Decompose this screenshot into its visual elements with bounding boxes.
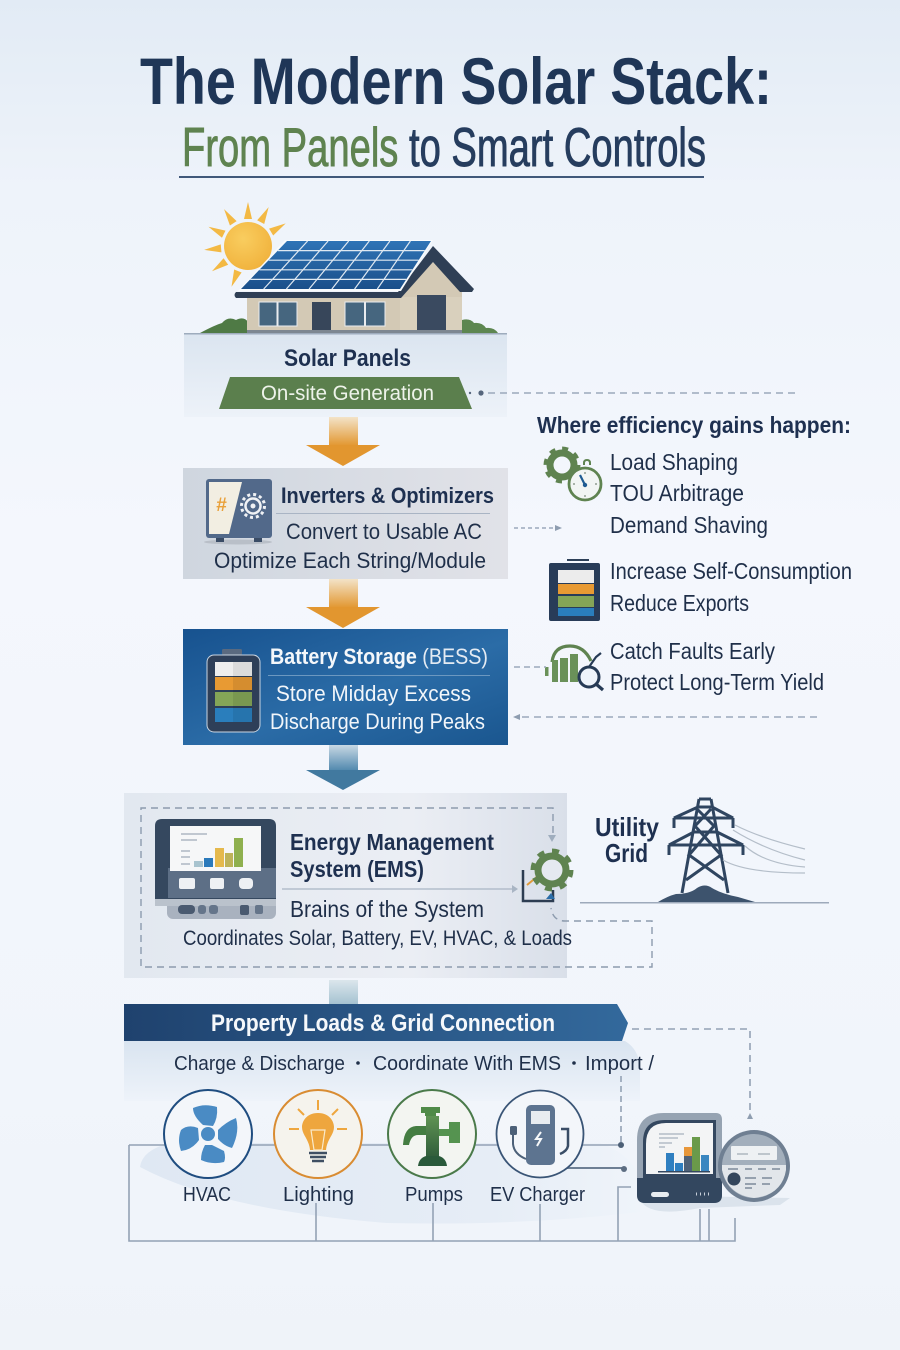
connector: solar to efficiency — [469, 390, 798, 396]
ground shadow — [140, 1143, 642, 1224]
monitor — [637, 1113, 722, 1203]
text: load shaping: Load Shaping — [610, 449, 738, 475]
dark roof — [234, 246, 474, 298]
load: EV charger — [490, 1090, 585, 1206]
text: optimize each string: Optimize Each String/Module — [214, 548, 486, 573]
icon: monitor and smart meter — [637, 1113, 790, 1212]
icon: sun — [204, 202, 288, 288]
panel: energy management system — [124, 793, 652, 978]
label: pumps: Pumps — [405, 1184, 463, 1206]
icon: bulb — [289, 1100, 347, 1161]
heading: solar panels: Solar Panels — [284, 345, 411, 372]
text: coordinates: Coordinates Solar, Battery, EV, HVAC, & Loads — [183, 927, 572, 950]
label: lighting: Lighting — [283, 1184, 354, 1206]
icon: pump — [403, 1107, 460, 1166]
arrow: inverter to battery — [306, 579, 380, 628]
heading: inverters: Inverters & Optimizers — [281, 483, 494, 508]
panel: property loads header — [124, 1004, 628, 1041]
icon: house with solar roof — [200, 240, 498, 333]
text: bullet two — [572, 1061, 576, 1065]
icon: monitoring chart and magnifier — [545, 646, 603, 690]
text: brains of the system: Brains of the System — [290, 896, 484, 922]
text: discharge during peaks: Discharge During Peaks — [270, 709, 485, 734]
badge: on-site generation — [219, 377, 472, 409]
connector: inverter to efficiency — [514, 525, 562, 531]
icon: fan — [179, 1105, 237, 1163]
load: pumps — [388, 1090, 476, 1206]
bushes — [200, 318, 248, 333]
text: import: Import / — [585, 1053, 654, 1075]
text: increase self-consumption: Increase Self-Consumption — [610, 558, 852, 584]
icon: inverter — [204, 479, 272, 544]
icon: battery tablet — [549, 559, 600, 621]
text: TOU arbitrage: TOU Arbitrage — [610, 480, 744, 506]
panel: battery storage — [183, 629, 508, 745]
title line 2: From Panels to Smart Controls — [182, 116, 706, 178]
connector: return to battery — [513, 714, 822, 720]
connector: battery to monitoring — [514, 666, 546, 668]
icon: gear and stopwatch — [546, 448, 601, 500]
panel: property loads header: Property Loads & Grid Connection — [211, 1010, 555, 1037]
solar array — [238, 240, 433, 291]
panel: inverters and optimizers — [183, 468, 508, 579]
heading: EMS line 2: System (EMS) — [290, 856, 424, 882]
icon: battery — [207, 649, 260, 732]
text: protect long-term yield: Protect Long-Term Yield — [610, 669, 824, 695]
title — [140, 44, 772, 178]
load: lighting — [274, 1090, 362, 1206]
heading: efficiency gains: Where efficiency gains happen: — [537, 412, 851, 438]
label: HVAC: HVAC — [183, 1184, 231, 1206]
panel: loads subheader — [124, 1041, 654, 1101]
panel: efficiency gains — [537, 412, 852, 695]
title line 1: The Modern Solar Stack: — [140, 44, 772, 118]
text: catch faults early: Catch Faults Early — [610, 638, 775, 664]
arrow: EMS to loads — [329, 980, 358, 1005]
arrow: battery to EMS — [306, 745, 380, 790]
dashed EMS loop — [141, 808, 652, 967]
text: charge and discharge: Charge & Discharge — [174, 1053, 345, 1075]
connector dots — [618, 1113, 753, 1172]
badge: on-site generation: On-site Generation — [261, 382, 434, 405]
walls — [247, 262, 462, 333]
label: utility grid: Utility — [595, 812, 659, 842]
label: utility grid — [595, 812, 659, 868]
heading: EMS line 1: Energy Management — [290, 829, 494, 855]
icon: inverter: # — [216, 495, 227, 516]
icon: control gear — [523, 835, 571, 901]
heading: battery storage: Battery Storage (BESS) — [270, 644, 488, 669]
label: utility grid: Grid — [605, 838, 648, 868]
doors — [312, 302, 331, 333]
windows — [259, 302, 297, 326]
text: store midday excess: Store Midday Excess — [276, 681, 471, 706]
icon: EV charger — [510, 1105, 568, 1165]
text: demand shaving: Demand Shaving — [610, 512, 768, 538]
icon: utility grid tower — [580, 799, 829, 904]
load wiring diagram — [129, 1029, 750, 1241]
text: bullet one — [356, 1061, 360, 1065]
title underline — [179, 176, 704, 178]
text: coordinate with EMS: Coordinate With EMS — [373, 1053, 561, 1075]
load: HVAC — [164, 1090, 252, 1206]
panel: solar panels — [184, 333, 507, 417]
arrow: solar to inverter — [306, 417, 380, 466]
icon: EMS console — [155, 819, 276, 919]
text: convert to usable AC: Convert to Usable AC — [286, 519, 482, 544]
smart meter — [718, 1130, 790, 1202]
arrow: EMS divider — [282, 885, 518, 893]
label: EV charger: EV Charger — [490, 1184, 585, 1206]
text: reduce exports: Reduce Exports — [610, 590, 749, 616]
